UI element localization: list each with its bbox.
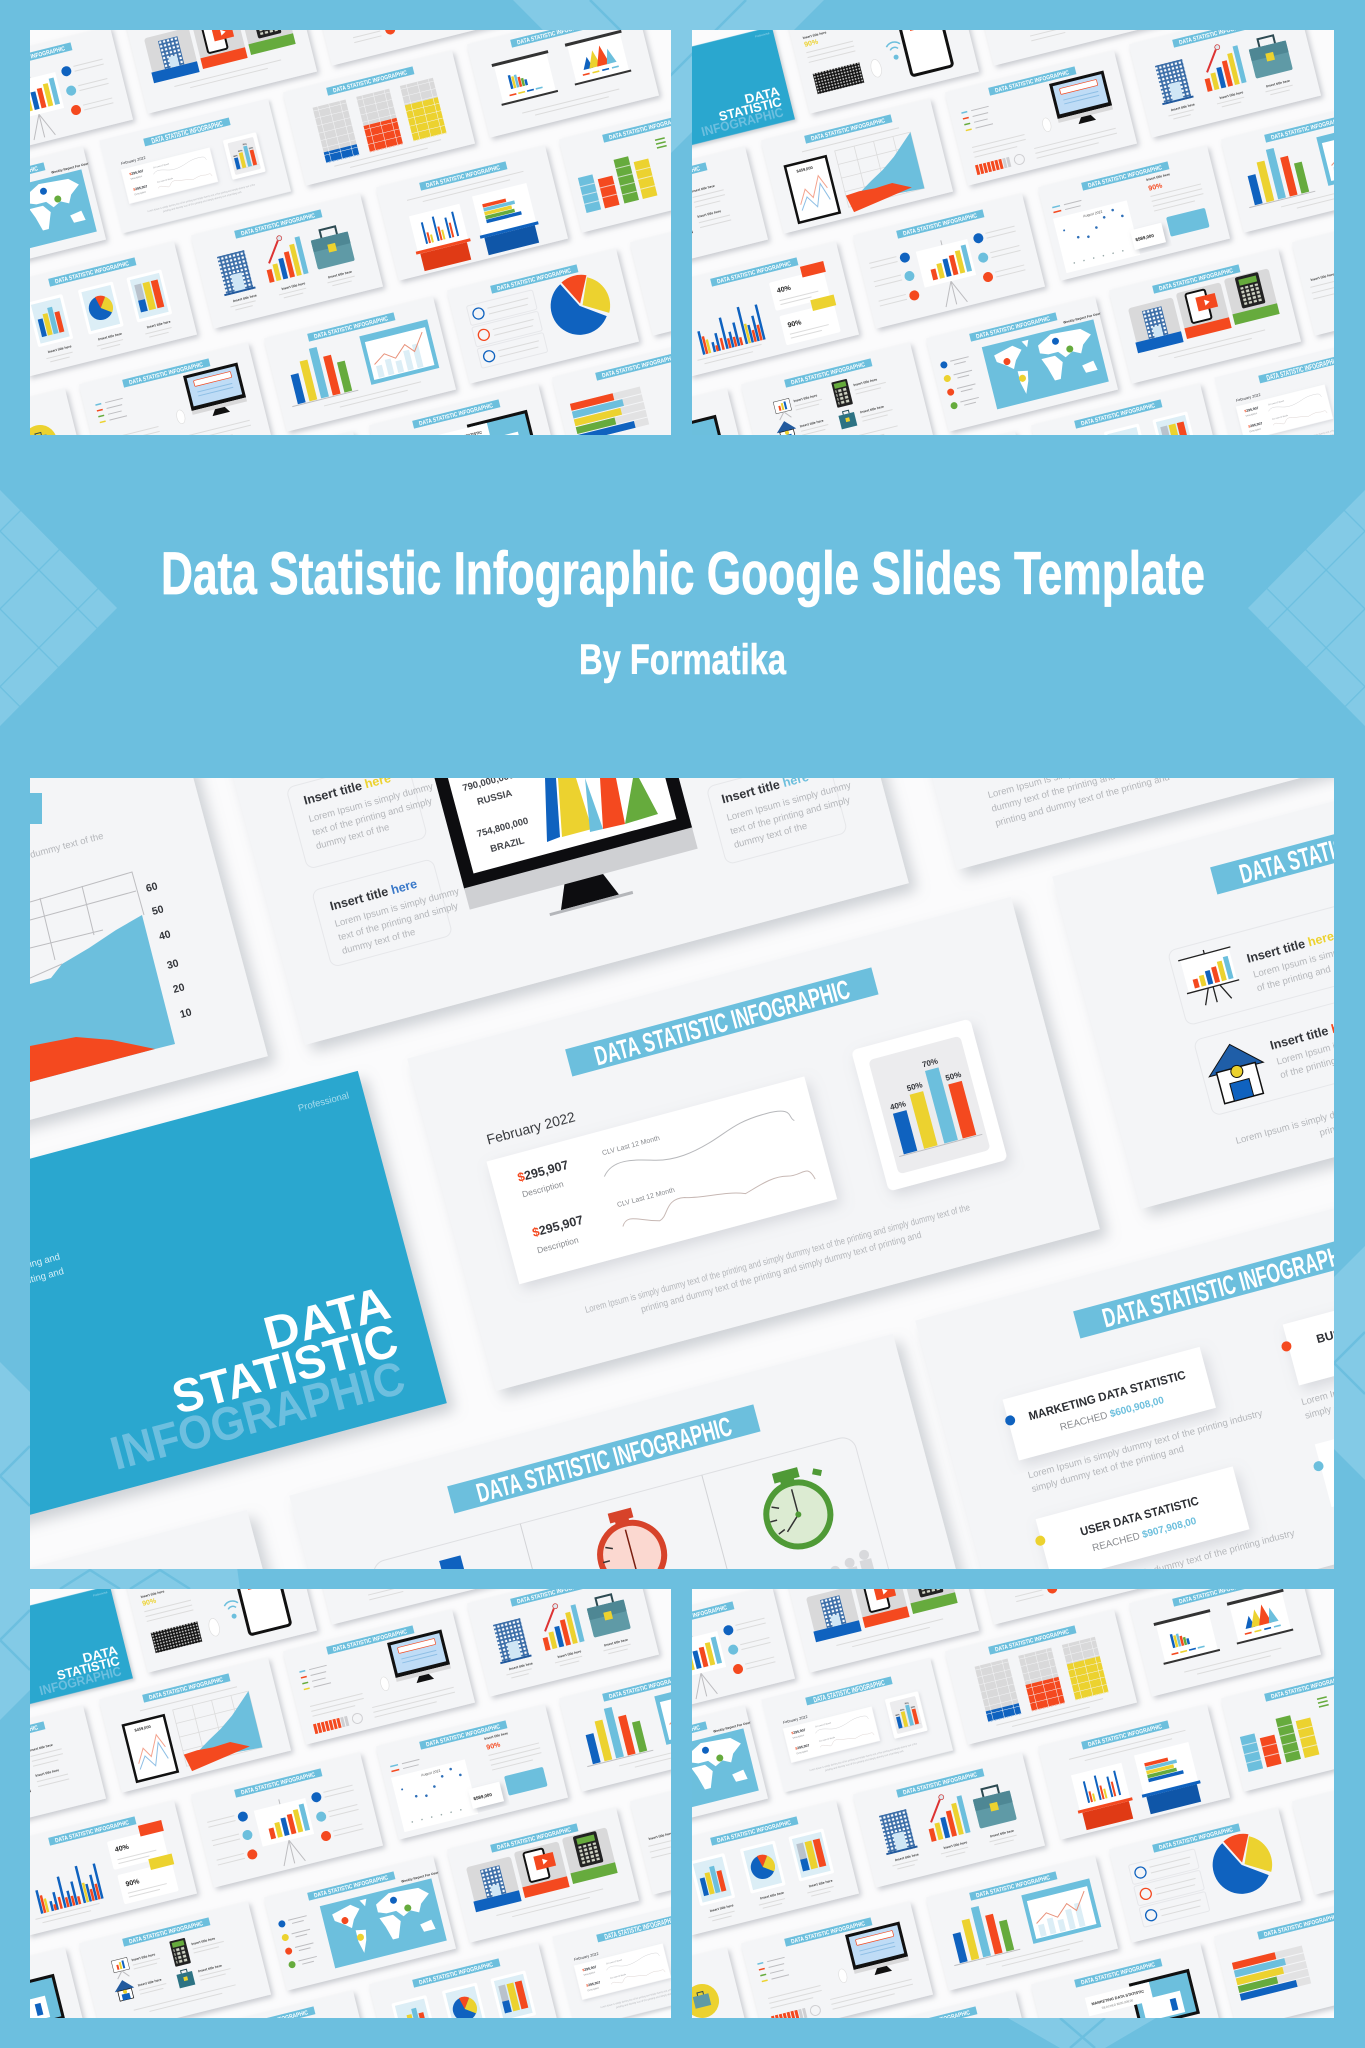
slide: monitor statistics: Lorem Ipsum is simply dummy: [726, 780, 853, 824]
slide: monitor statistics: dummy text of the: [341, 927, 417, 957]
slide: market charts on podiums: DATA STATISTIC INFOGRAPHIC: [426, 165, 501, 189]
slide: stacked cube columns: [559, 97, 751, 233]
slide: horizontal bars: [552, 335, 744, 471]
slide: three chart cards: [5, 241, 197, 377]
slide: area chart: 60: [145, 880, 159, 895]
slide: tablet and area chart: $459,000: [796, 165, 814, 174]
slide: three coloured tables: DATA STATISTIC INFOGRAPHIC: [333, 70, 408, 94]
slide: august line chart: August 2022: [1083, 210, 1103, 218]
slide: easel and house cards: Insert title here: [1245, 929, 1335, 966]
slide: marketing statistics: Lorem Ipsum is simply dummy text of the printing industry: [1059, 1528, 1296, 1601]
panel: bottom right slide wall: [692, 1589, 1334, 2018]
slide: top text: [971, 0, 1163, 66]
slide: titles and tablet: Insert title here: [691, 184, 715, 194]
card: user: REACHED $907,908,00: [1091, 1516, 1198, 1554]
slide: cover: STATISTIC: [166, 1313, 403, 1424]
slide: easel and house cards: of the printing and: [1256, 964, 1332, 994]
slide: bar cluster and stat cards: 40%: [776, 285, 792, 295]
card: marketing: [1000, 1347, 1216, 1461]
slide: monitor with people: [945, 50, 1137, 186]
slide: tablet and area chart: [761, 98, 953, 234]
slide: monitor statistics: text of the printing and simply: [729, 795, 852, 837]
slide: partial marketing: [558, 388, 750, 524]
slide: top right lorem: dummy text of the printing and simply dummy text of the: [990, 743, 1221, 815]
slide: stacked cube columns: DATA STATISTIC INFOGRAPHIC: [609, 117, 684, 141]
slide: monitor statistics: text of the printing and simply: [311, 796, 434, 839]
slide: cover: [0, 1071, 447, 1565]
slide: february line charts: [99, 99, 291, 233]
card: user: USER DATA STATISTIC: [1079, 1494, 1200, 1539]
panel: bottom left slide wall: [30, 1589, 671, 2018]
slide: building rocket briefcase: Insert title here: [328, 270, 352, 279]
slide: bars and line window: [264, 296, 456, 432]
slide: marketing statistics: simply dummy text of the printing and: [1030, 1444, 1185, 1495]
slide: partial lower title: DATA STATISTIC INFOGRAPHIC: [234, 451, 309, 475]
card: bar chart: 40%: [889, 1099, 907, 1112]
slide: partial lower title: [184, 431, 376, 567]
slide: monitor statistics: [216, 551, 909, 1045]
card: business: [1276, 1272, 1365, 1387]
slide: monitor statistics: 790,000,000: [461, 770, 515, 794]
slide: three chart cards: Insert title here: [98, 332, 122, 341]
slide: keyboard tablet wifi: 90%: [804, 38, 820, 49]
slide: monitor statistics: dummy text of the: [315, 822, 391, 852]
slide: market charts on podiums: [376, 145, 568, 281]
card: line charts: $295,907: [516, 1158, 570, 1185]
slide: keyboard tablet wifi: Insert title here: [802, 30, 827, 40]
panel: large centre slide wall: [0, 725, 1365, 1601]
slide: small cover: [603, 27, 795, 161]
slide: building rocket briefcase: DATA STATISTIC INFOGRAPHIC: [241, 213, 316, 237]
slide: keyboard tablet wifi: [787, 0, 979, 114]
slide: three coloured tables: [283, 50, 475, 186]
slide: marketing statistic monitor: DATA STATISTIC INFOGRAPHIC: [419, 403, 494, 427]
slide: easel and house cards: Insert title here: [1269, 1016, 1359, 1053]
slide: stopwatches: DATA STATISTIC INFOGRAPHIC: [473, 1411, 735, 1508]
card: user: [1030, 1466, 1249, 1584]
slide: four small icons: Insert title here: [853, 377, 878, 387]
slide: bottom left blank: [0, 1510, 336, 2004]
description text: Lorem Ipsum is simply dummy text of the printing and simply dummy text of the printing and simply dummy text of the: [584, 1202, 971, 1316]
card: line charts: CLV Last 12 Month: [602, 1135, 661, 1157]
icon: green stopwatch: [756, 1461, 839, 1554]
slide: titles and tablet: Insert title here: [697, 209, 722, 219]
date heading: February 2022: [485, 1108, 577, 1147]
slide: pie chart: [447, 248, 639, 384]
slide: right edge blank: [630, 200, 822, 336]
slide: cover: INFOGRAPHIC: [105, 1350, 410, 1480]
slide: three chart cards: Insert title here: [146, 320, 171, 329]
slide: tablet and area chart: DATA STATISTIC INFOGRAPHIC: [811, 118, 886, 142]
slide: marketing statistic monitor: REACHED $600,908,00: [439, 439, 472, 451]
slide: right edge insert title: [1292, 200, 1365, 336]
slide: horizontal bars: DATA STATISTIC INFOGRAPHIC: [602, 355, 677, 379]
card: bar chart: 70%: [921, 1056, 939, 1069]
slide: area chart: dummy text of the: [29, 831, 105, 861]
slide: right edge insert title: Insert title here: [1310, 272, 1335, 282]
slide: building rocket briefcase: [191, 193, 383, 329]
slide: marketing statistic monitor: [369, 383, 561, 519]
slide: three chart cards: Insert title here: [47, 344, 72, 354]
slide: two presentation boards: [467, 2, 659, 138]
slide: bars and line window: DATA STATISTIC INFOGRAPHIC: [314, 316, 389, 340]
slide: bars and line window: [1221, 97, 1365, 233]
slide: four small icons: [741, 342, 933, 478]
slide: three icon cards: [1109, 248, 1301, 384]
slide: monitor statistics: Insert title here: [302, 771, 392, 808]
slide: building rocket briefcase: [1129, 2, 1321, 138]
slide: easel and house cards: [1052, 715, 1365, 1209]
slide: august line chart: DATA STATISTIC INFOGRAPHIC: [1088, 165, 1163, 189]
slide: august line chart: [1038, 145, 1230, 281]
icon: easel: [1177, 943, 1243, 1009]
slide: cover: Professional: [297, 1090, 350, 1114]
slide: four small icons: Insert title here: [799, 419, 824, 428]
card: line charts: CLV Last 12 Month: [616, 1187, 676, 1209]
description text: [584, 1202, 975, 1329]
slide: monitor with people: [79, 342, 271, 478]
slide: marketing statistic monitor: MARKETING DATA STATISTIC: [429, 430, 483, 447]
slide: area chart: [0, 724, 268, 1218]
slide: marketing statistics: Lorem Ipsum is simply dummy text of the printing industry: [1027, 1408, 1264, 1481]
slide: top right lorem: [868, 376, 1365, 870]
icon: house: [1203, 1037, 1271, 1106]
card: line charts: Description: [536, 1235, 580, 1255]
panel: top right slide wall: [626, 20, 1335, 475]
card: bar chart: 50%: [944, 1070, 962, 1083]
slide: august line chart: $589,000: [1135, 233, 1155, 242]
slide: monitor statistics: 754,800,000: [476, 816, 530, 840]
slide: marketing statistics: [915, 1159, 1365, 1653]
slide: monitor with people: DATA STATISTIC INFOGRAPHIC: [129, 362, 204, 386]
slide: monitor statistics: Insert title here: [328, 877, 419, 913]
card: marketing: MARKETING DATA STATISTIC: [1027, 1368, 1187, 1423]
slide: three icon cards: [125, 0, 317, 114]
slide: area chart: 50: [151, 903, 165, 918]
slide: monitor statistics: RUSSIA: [476, 788, 514, 808]
slide: monitor statistics: Insert title here: [720, 770, 810, 806]
card: bar chart: 50%: [906, 1080, 924, 1093]
card: marketing: REACHED $600,908,00: [1059, 1395, 1166, 1434]
slide: area chart: 30: [166, 957, 180, 972]
slide: world map: [0, 146, 108, 282]
card: line charts: $295,907: [531, 1213, 585, 1240]
slide: three chart cards: DATA STATISTIC INFOGRAPHIC: [55, 261, 130, 285]
slide: three chart cards: [1031, 383, 1223, 519]
slide: top slide with red dot: [309, 0, 501, 66]
slide: easel and house cards: of the printing and: [1279, 1051, 1355, 1081]
slide: pie chart: DATA STATISTIC INFOGRAPHIC: [497, 268, 572, 292]
subtitle: By Formatika: [579, 636, 787, 684]
slide: august line chart: 90%: [1148, 182, 1164, 193]
slide: two presentation boards: DATA STATISTIC INFOGRAPHIC: [517, 22, 592, 46]
slide: four small icons: Insert title here: [793, 393, 818, 403]
slide: world map: Weekly Report For User: [51, 161, 90, 175]
slide: building rocket briefcase: Insert title here: [281, 281, 306, 291]
icon: red stopwatch: [589, 1502, 671, 1594]
slide: yellow circle briefcase: [0, 388, 88, 524]
card: line charts: [486, 1076, 837, 1284]
card: line charts: Description: [521, 1179, 565, 1199]
slide: top right lorem: printing and dummy text of the printing and: [994, 772, 1171, 829]
slide: monitor statistics: dummy text of the: [733, 821, 809, 851]
slide: partial lower title: [846, 431, 1038, 567]
slide: bar cluster and stat cards: DATA STATISTIC INFOGRAPHIC: [717, 261, 792, 285]
slide: bar cluster and stat cards: 90%: [787, 319, 803, 329]
slide: monitor statistics: text of the printing and simply: [337, 901, 460, 943]
slide: top right lorem: Lorem Ipsum is simply dummy text of the printing and simply: [987, 725, 1236, 801]
panel: top left slide wall: [0, 0, 684, 475]
description text: printing and dummy text of the printing and simply dummy text of printing and: [640, 1230, 923, 1315]
slide: monitor statistics: BRAZIL: [489, 835, 526, 855]
slide: top text: Insert title here: [1033, 20, 1057, 30]
slide: bar cluster and stat cards: [667, 241, 859, 377]
slide: world map: [926, 296, 1120, 432]
card: bar chart: [851, 1019, 1008, 1191]
slide: cover: DATA: [258, 1276, 395, 1360]
slide: february line charts: [1214, 336, 1365, 470]
slide: stopwatches: [289, 1334, 982, 1828]
slide: titles and tablet: DATA STATISTIC INFOGRAPHIC: [626, 166, 701, 190]
slide: august line chart: Insert title here: [1146, 172, 1171, 182]
slide: area chart: 10: [179, 1006, 193, 1021]
slide: easel with circles: [853, 193, 1045, 329]
slide: easel with circles: [0, 26, 133, 162]
slide: four small icons: DATA STATISTIC INFOGRAPHIC: [791, 362, 866, 386]
slide: area chart: 40: [158, 928, 172, 943]
slide: monitor statistics: Lorem Ipsum is simply dummy: [334, 886, 461, 930]
slide: building rocket briefcase: Insert title here: [233, 293, 257, 303]
title banner: DATA STATISTIC INFOGRAPHIC: [591, 974, 853, 1071]
slide: monitor statistics: Lorem Ipsum is simply dummy: [308, 781, 435, 825]
slide: february line charts: [407, 897, 1100, 1391]
title banner: [565, 967, 879, 1078]
slide: area chart: 20: [172, 981, 186, 996]
slide: four small icons: Insert title here: [860, 405, 884, 414]
slide: titles and tablet: [576, 146, 768, 282]
slide: partial lower title: DATA STATISTIC INFOGRAPHIC: [896, 451, 971, 475]
